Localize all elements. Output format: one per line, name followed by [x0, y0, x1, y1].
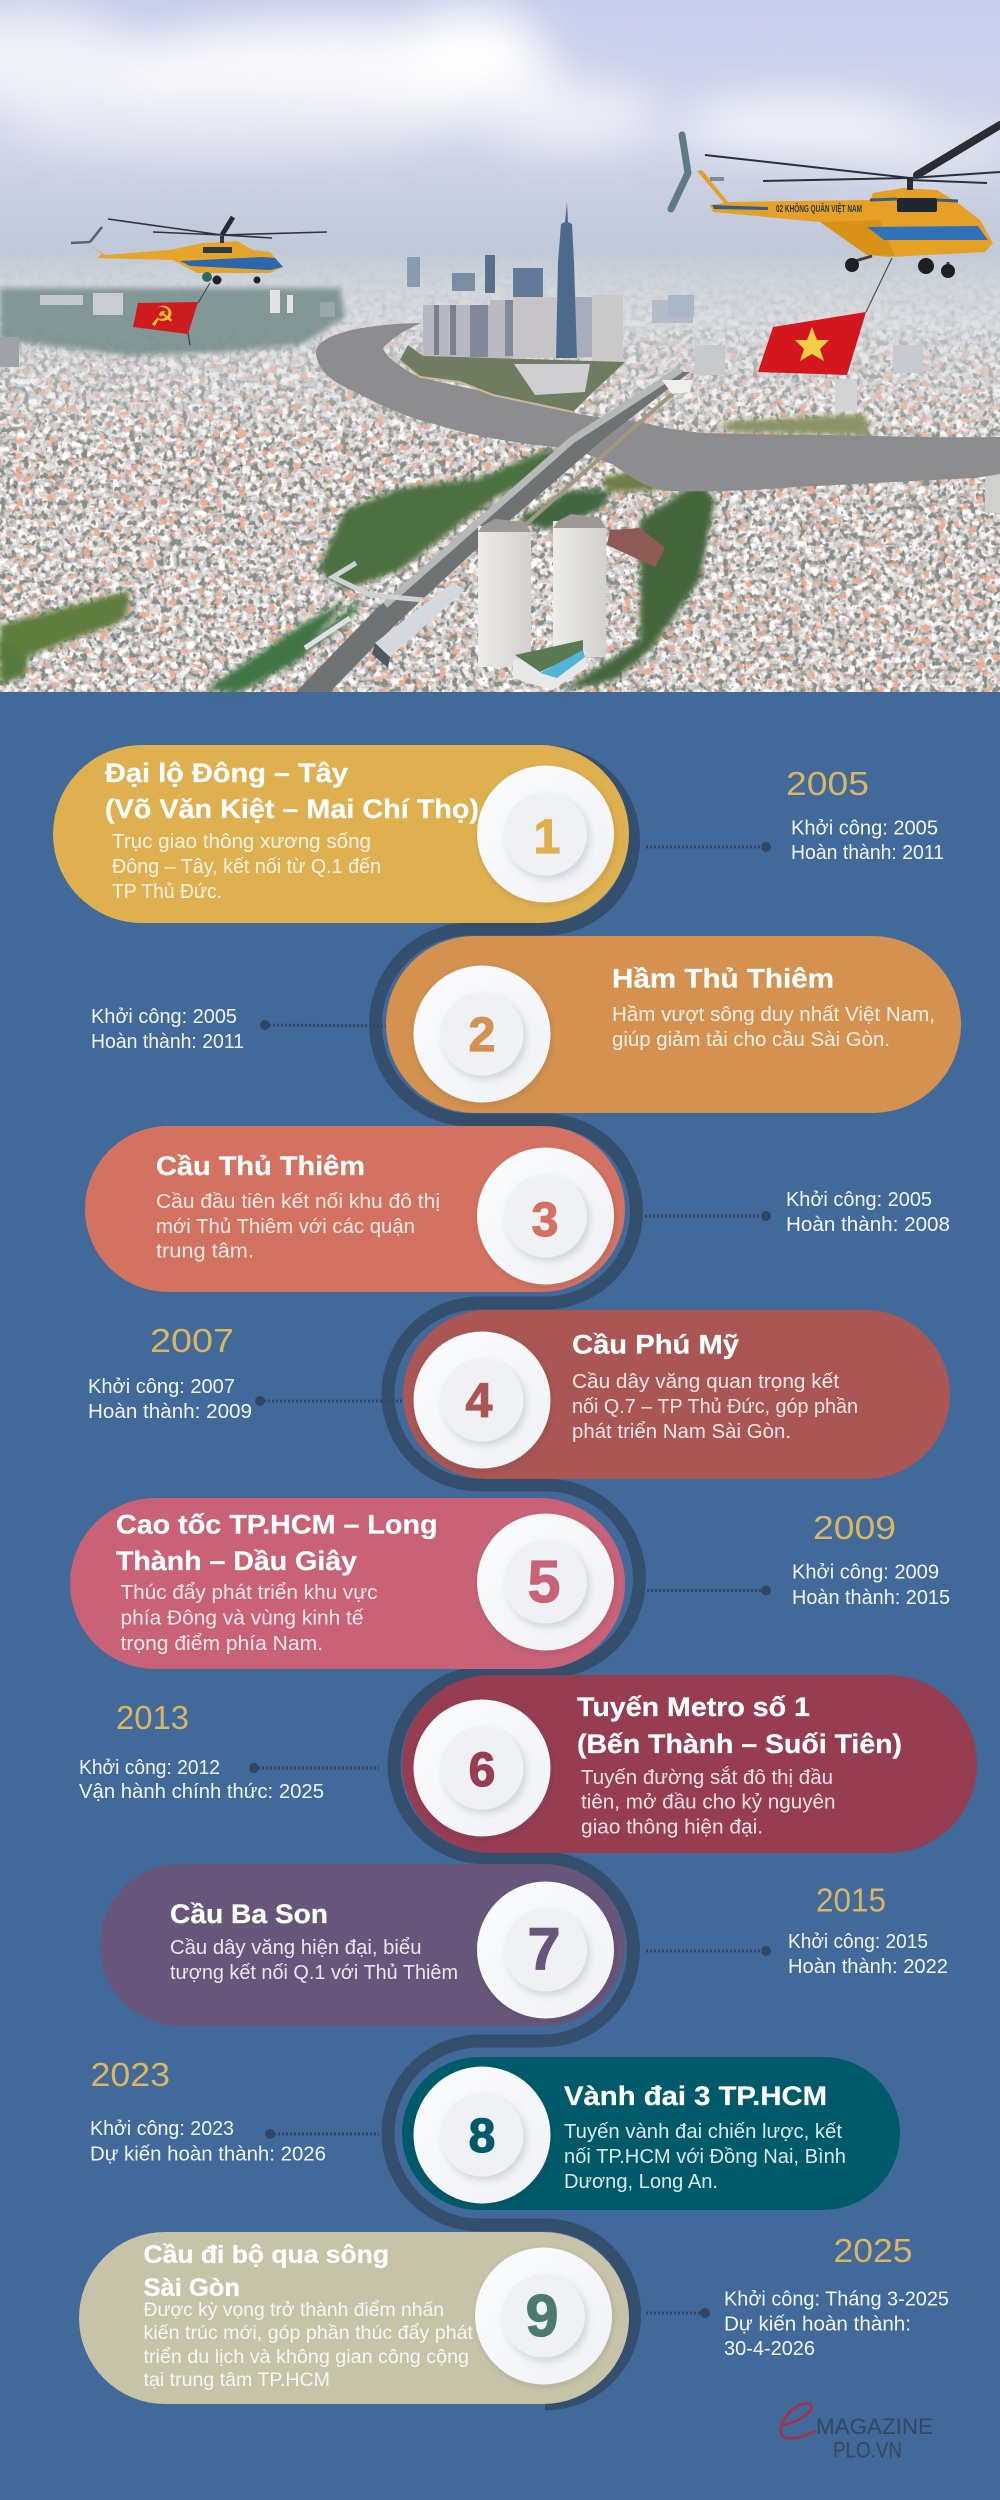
description: Hầm vượt sông duy nhất Việt Nam, [612, 1004, 935, 1026]
skyline towers [0, 202, 1000, 513]
description: phía Đông và vùng kinh tế [120, 1608, 364, 1630]
panel: milestone 2 [386, 936, 961, 1113]
dates 2: Hoàn thành: 2011 [91, 1031, 244, 1053]
number badge 6: 6 [469, 1744, 495, 1797]
description: kiến trúc mới, góp phần thúc đẩy phát [144, 2323, 474, 2344]
pill [386, 936, 961, 1113]
heading [577, 1692, 902, 1759]
connector 2 [260, 1020, 386, 1030]
wordmark: PLO.VN [833, 2438, 902, 2463]
highway and bridge [296, 370, 693, 692]
large helicopter [671, 125, 1000, 278]
hero photo: helicopters flying flags over the city [0, 0, 1000, 692]
large helicopter: 02 KHÔNG QUÂN VIỆT NAM [776, 202, 862, 215]
description: Được kỳ vọng trở thành điểm nhấn [144, 2300, 444, 2321]
small helicopter [71, 217, 327, 284]
logo: eMagazine PLO.VN [781, 2403, 933, 2463]
heading [144, 2241, 389, 2302]
river [316, 323, 1000, 491]
dates 1: Hoàn thành: 2011 [791, 842, 944, 864]
dates 6 [79, 1757, 324, 1803]
heading: Tuyến Metro số 1 [577, 1692, 810, 1722]
year 2009: 2009 [813, 1509, 896, 1546]
description: Cầu dây văng quan trọng kết [572, 1371, 839, 1393]
dates 3: Hoàn thành: 2008 [786, 1214, 950, 1236]
dates 3: Khởi công: 2005 [786, 1189, 932, 1211]
number badge 5 [477, 1514, 614, 1650]
panel: milestone 3 [85, 1126, 625, 1292]
number badge 6 [414, 1700, 550, 1836]
sky with clouds [0, 0, 1000, 300]
year 2013: 2013 [116, 1699, 189, 1736]
dates 2: Khởi công: 2005 [91, 1006, 237, 1028]
Vietnam flag [758, 258, 892, 375]
number badge 4 [414, 1332, 550, 1468]
description: giao thông hiện đại. [581, 1816, 763, 1838]
pill [79, 2232, 629, 2404]
panel: milestone 4 [403, 1310, 950, 1479]
heading: Cầu Ba Son [170, 1899, 328, 1929]
number badge 1: 1 [534, 811, 560, 864]
green belts [0, 414, 870, 692]
factory roof [607, 528, 665, 567]
description: Cầu đầu tiên kết nối khu đô thị [156, 1191, 440, 1213]
island park and shoreline [400, 345, 625, 412]
connector 6 [249, 1763, 379, 1773]
panel: milestone 7 [100, 1864, 625, 2026]
number badge 3: 3 [532, 1194, 558, 1247]
number badge 5: 5 [528, 1549, 560, 1615]
dates 4: Khởi công: 2007 [88, 1376, 235, 1398]
number badge 9 [475, 2248, 612, 2384]
dates 7 [788, 1931, 948, 1978]
heading [105, 758, 479, 824]
dates 7: Khởi công: 2015 [788, 1931, 928, 1953]
number badge 8 [414, 2066, 550, 2204]
description: Dương, Long An. [564, 2171, 718, 2193]
description [170, 1937, 458, 1984]
description: Thúc đẩy phát triển khu vực [120, 1582, 378, 1604]
description: tiên, mở đầu cho kỷ nguyên [581, 1792, 836, 1814]
serpentine timeline path [376, 752, 640, 2404]
dates 1: Khởi công: 2005 [791, 818, 938, 840]
pill [402, 1675, 977, 1853]
number badge 9: 9 [526, 2283, 558, 2349]
pill [403, 1310, 950, 1479]
heading: (Võ Văn Kiệt – Mai Chí Thọ) [105, 794, 479, 824]
description: trọng điểm phía Nam. [120, 1633, 323, 1655]
party flag: ☭ [149, 300, 175, 333]
panel: milestone 9 [79, 2232, 629, 2404]
description [612, 1004, 935, 1051]
pill [85, 1126, 625, 1292]
panel: milestone 6 [402, 1675, 977, 1853]
number badge 7: 7 [528, 1916, 560, 1982]
icon: script e [781, 2403, 815, 2438]
pill [402, 2057, 900, 2210]
dates 6: Khởi công: 2012 [79, 1757, 220, 1779]
dates 5 [792, 1562, 950, 1609]
description [581, 1766, 836, 1838]
panel: milestone 5 [70, 1498, 625, 1669]
dates 3 [786, 1189, 950, 1236]
number badge 2: 2 [469, 1009, 495, 1062]
white twin towers [478, 514, 606, 690]
heading [116, 1510, 438, 1576]
description: mới Thủ Thiêm với các quận [156, 1216, 415, 1238]
description: Tuyến vành đai chiến lược, kết [564, 2121, 842, 2143]
pill [100, 1864, 625, 2026]
heading: (Bến Thành – Suối Tiên) [577, 1729, 902, 1759]
heading: Sài Gòn [144, 2274, 240, 2302]
dates 9 [724, 2289, 949, 2360]
dates 8 [90, 2118, 326, 2166]
connector 5 [647, 1586, 771, 1596]
description: nối TP.HCM với Đồng Nai, Bình [564, 2146, 846, 2168]
dates 5: Hoàn thành: 2015 [792, 1587, 950, 1609]
description: tượng kết nối Q.1 với Thủ Thiêm [170, 1962, 458, 1984]
dark alleys between buildings [0, 330, 1000, 692]
far-left wooded bank [0, 288, 345, 356]
description [112, 831, 381, 903]
description: TP Thủ Đức. [112, 881, 222, 903]
description: giúp giảm tải cho cầu Sài Gòn. [612, 1029, 890, 1051]
panel: milestone 8 [402, 2057, 900, 2210]
dates 9: 30-4-2026 [724, 2338, 815, 2360]
panel: milestone 1 [53, 745, 629, 923]
heading: Đại lộ Đông – Tây [105, 758, 348, 788]
pill [53, 745, 629, 923]
year 2025: 2025 [834, 2232, 912, 2269]
dates 2 [91, 1006, 244, 1053]
distant haze over the skyline [0, 250, 1000, 450]
number badge 2 [414, 966, 550, 1102]
heading: Cầu đi bộ qua sông [144, 2241, 389, 2269]
dates 4: Hoàn thành: 2009 [88, 1401, 252, 1423]
description [144, 2300, 474, 2391]
number badge 3 [477, 1148, 614, 1284]
heading: Thành – Dầu Giây [116, 1546, 357, 1576]
heading: Cao tốc TP.HCM – Long [116, 1510, 438, 1540]
dates 8: Khởi công: 2023 [90, 2118, 234, 2140]
connector 7 [646, 1946, 771, 1956]
dates 8: Dự kiến hoàn thành: 2026 [90, 2144, 326, 2166]
connector 3 [645, 1211, 771, 1221]
description: Trục giao thông xương sống [112, 831, 371, 853]
number badge 8: 8 [469, 2110, 495, 2163]
connector 1 [646, 842, 771, 852]
dates 9: Dự kiến hoàn thành: [724, 2314, 911, 2336]
description: Đông – Tây, kết nối từ Q.1 đến [112, 856, 381, 878]
year 2007: 2007 [150, 1322, 234, 1359]
description [156, 1191, 440, 1262]
number badge 1 [477, 766, 614, 902]
description: Cầu dây văng hiện đại, biểu [170, 1937, 422, 1959]
dates 6: Vận hành chính thức: 2025 [79, 1781, 324, 1803]
description: triển du lịch và không gian công cộng [144, 2347, 469, 2368]
heading: Hầm Thủ Thiêm [612, 964, 834, 994]
dates 4 [88, 1376, 252, 1423]
description: trung tâm. [156, 1240, 254, 1262]
description: nối Q.7 – TP Thủ Đức, góp phần [572, 1396, 858, 1418]
wordmark: MAGAZINE [816, 2414, 933, 2439]
year 2005: 2005 [786, 765, 869, 802]
dates 7: Hoàn thành: 2022 [788, 1956, 948, 1978]
heading: Cầu Phú Mỹ [572, 1330, 739, 1360]
wordmark [816, 2414, 933, 2463]
heading: Cầu Thủ Thiêm [156, 1151, 365, 1181]
description: tại trung tâm TP.HCM [144, 2370, 330, 2391]
year 2023: 2023 [90, 2056, 170, 2093]
connector 9 [646, 2308, 710, 2318]
pill [70, 1498, 625, 1669]
dates 9: Khởi công: Tháng 3-2025 [724, 2289, 949, 2311]
party flag [133, 283, 210, 345]
connector 4 [255, 1396, 403, 1406]
number badge 4: 4 [466, 1375, 493, 1428]
number badge 7 [477, 1882, 614, 2018]
heading: Vành đai 3 TP.HCM [564, 2081, 827, 2111]
description: phát triển Nam Sài Gòn. [572, 1421, 791, 1443]
city base [0, 250, 1000, 692]
connector 8 [265, 2129, 379, 2139]
description [120, 1582, 378, 1655]
description: Tuyến đường sắt đô thị đầu [581, 1766, 833, 1789]
year 2015: 2015 [816, 1882, 886, 1918]
description [564, 2121, 846, 2193]
metro station and footbridge [305, 563, 465, 668]
orange roofs [0, 340, 1000, 692]
dates 5: Khởi công: 2009 [792, 1562, 939, 1584]
dates 1 [791, 818, 944, 864]
description [572, 1371, 858, 1443]
